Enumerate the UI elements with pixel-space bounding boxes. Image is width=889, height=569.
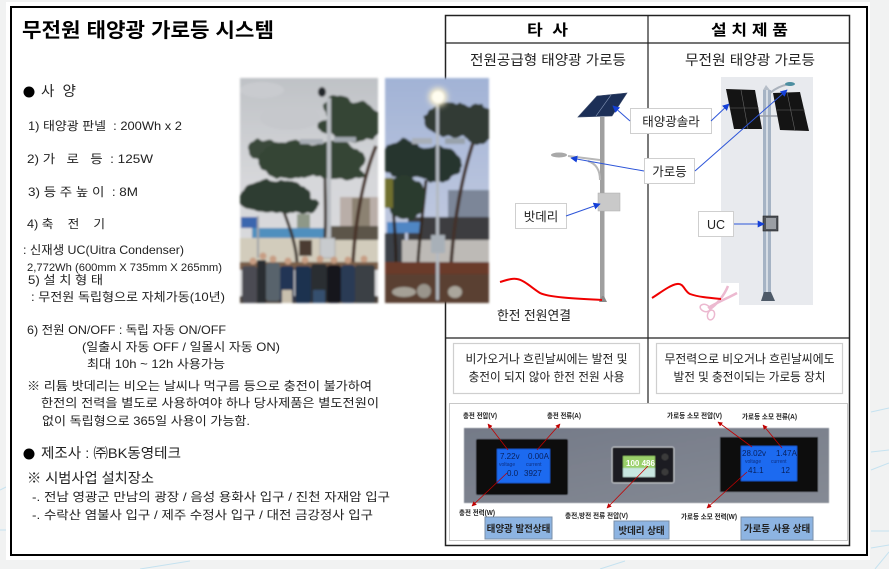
illustration: off grid solar street light — [721, 77, 813, 305]
spec list: 1) 태양광 판넬 : 200Wh x 2 — [28, 119, 182, 133]
meter readings: voltage — [745, 459, 761, 465]
arrows: callouts to parts — [566, 90, 787, 224]
red line: grid power connection — [500, 279, 602, 300]
pilot project sites — [27, 470, 390, 522]
spec list: 최대 10h ~ 12h 사용가능 — [87, 357, 225, 371]
callout: battery — [516, 204, 566, 228]
pilot project sites: -. 전남 영광군 만남의 광장 / 음성 용화사 입구 / 진천 자재암 입구 — [32, 489, 390, 504]
meter readings: 100 486 — [626, 459, 655, 468]
red line: cut power connection — [652, 284, 721, 299]
pilot project sites: -. 수락산 염불사 입구 / 제주 수정사 입구 / 대전 금강정사 입구 — [32, 508, 373, 522]
callout: UC: UC — [707, 218, 725, 232]
meter readings: voltage — [499, 462, 515, 468]
pilot project sites: ※ 시범사업 설치장소 — [27, 470, 154, 486]
meter labels: 충전 전력(W) — [459, 508, 495, 517]
panel: specifications — [23, 83, 390, 522]
subtitle: grid powered: 전원공급형 태양광 가로등 — [470, 52, 626, 68]
spec list: 2,772Wh (600mm X 735mm X 265mm) — [27, 262, 222, 274]
heading: specifications: 사 양 — [41, 83, 76, 99]
callout: street lamp — [644, 158, 694, 184]
note: lithium battery: 없이 독립형으로 365일 사용이 가능함. — [42, 414, 250, 428]
callout: battery: 밧데리 — [524, 210, 558, 224]
spec list: : 무전원 독립형으로 자체가동(10년) — [31, 290, 225, 304]
callout: solar panel — [630, 108, 712, 134]
illustration: grid powered solar street light — [551, 93, 627, 302]
note box: installed product: 발전 및 충전이되는 가로등 장치 — [674, 370, 826, 384]
note box: installed product: 무전력으로 비오거나 흐린날씨에도 — [664, 352, 834, 366]
metal plate with meters — [464, 428, 829, 503]
status label: battery — [614, 521, 669, 539]
photo: daytime group at street light — [239, 78, 383, 303]
note: lithium battery: 한전의 전력을 별도로 사용하여야 하나 당사제품은 별도전원이 — [41, 396, 379, 410]
manufacturer: 제조사 : ㈜BK동영테크 — [41, 445, 181, 461]
meter readings: 7.22v — [500, 452, 520, 461]
spec list: : 신재생 UC(Uitra Condenser) — [23, 243, 184, 257]
status label: solar generation: 태양광 발전상태 — [487, 523, 550, 535]
comparison table frame — [445, 15, 850, 546]
callout: solar panel: 태양광솔라 — [642, 115, 700, 129]
spec list: 6) 전원 ON/OFF : 독립 자동 ON/OFF — [27, 323, 226, 337]
meter labels: 가로등 소모 전류(A) — [742, 412, 797, 421]
meter labels: 가로등 소모 전압(V) — [667, 411, 722, 420]
meter readings: 0.00A — [528, 452, 550, 461]
meter readings: current — [526, 462, 542, 468]
meter readings: 41.1 — [748, 466, 764, 475]
note: lithium battery: ※ 리튬 밧데리는 비오는 날씨나 먹구름 등으로 충전이 불가하여 — [27, 379, 372, 393]
meter labels: 가로등 소모 전력(W) — [681, 512, 737, 521]
spec list: 5) 설 치 형 태 — [28, 273, 103, 287]
callout: UC — [698, 212, 734, 236]
meter labels: 충전 전압(V) — [463, 411, 497, 420]
spec list: (일출시 자동 OFF / 일몰시 자동 ON) — [82, 340, 280, 354]
label: grid power connection: 한전 전원연결 — [497, 308, 571, 323]
status label: street lamp use — [741, 517, 813, 540]
icon: scissors — [699, 286, 737, 321]
note box: other company: 충전이 되지 않아 한전 전원 사용 — [468, 370, 624, 384]
red arrows — [472, 422, 782, 508]
spec list — [23, 119, 280, 371]
spec list: 4) 축 전 기 — [27, 217, 105, 231]
meter readings: 1.47A — [776, 449, 798, 458]
callout: street lamp: 가로등 — [652, 165, 687, 179]
meter labels: 충전 전류(A) — [547, 411, 581, 420]
meter readings — [499, 449, 798, 478]
status label: battery: 밧데리 상태 — [618, 525, 665, 537]
heading: specifications — [24, 83, 76, 99]
status label: street lamp use: 가로등 사용 상태 — [744, 523, 810, 535]
meter labels: 충전,방전 전류 전압(V) — [565, 511, 628, 520]
subtitle: off grid: 무전원 태양광 가로등 — [685, 52, 815, 68]
meter readings: 28.02v — [742, 449, 766, 458]
meter readings: current — [771, 459, 787, 465]
table header: other company: 타 사 — [527, 22, 568, 39]
meter readings: 0.0 — [507, 469, 519, 478]
meter labels — [459, 411, 797, 521]
panel: status meters — [450, 404, 848, 540]
spec list: 2) 가 로 등 : 125W — [27, 152, 154, 166]
table header: installed product: 설 치 제 품 — [711, 22, 788, 39]
meter readings: 3927 — [524, 469, 542, 478]
note box: installed product — [656, 344, 842, 394]
photo: street light at dusk — [382, 78, 495, 303]
note box: other company — [454, 344, 640, 394]
spec list: 3) 등 주 높 이 : 8M — [28, 185, 138, 199]
status label: solar generation — [485, 517, 552, 539]
meter readings: 12 — [781, 466, 790, 475]
note: lithium battery — [27, 379, 379, 428]
title: 무전원 태양광 가로등 시스템 — [22, 19, 274, 42]
note box: other company: 비가오거나 흐린날씨에는 발전 및 — [466, 352, 628, 366]
